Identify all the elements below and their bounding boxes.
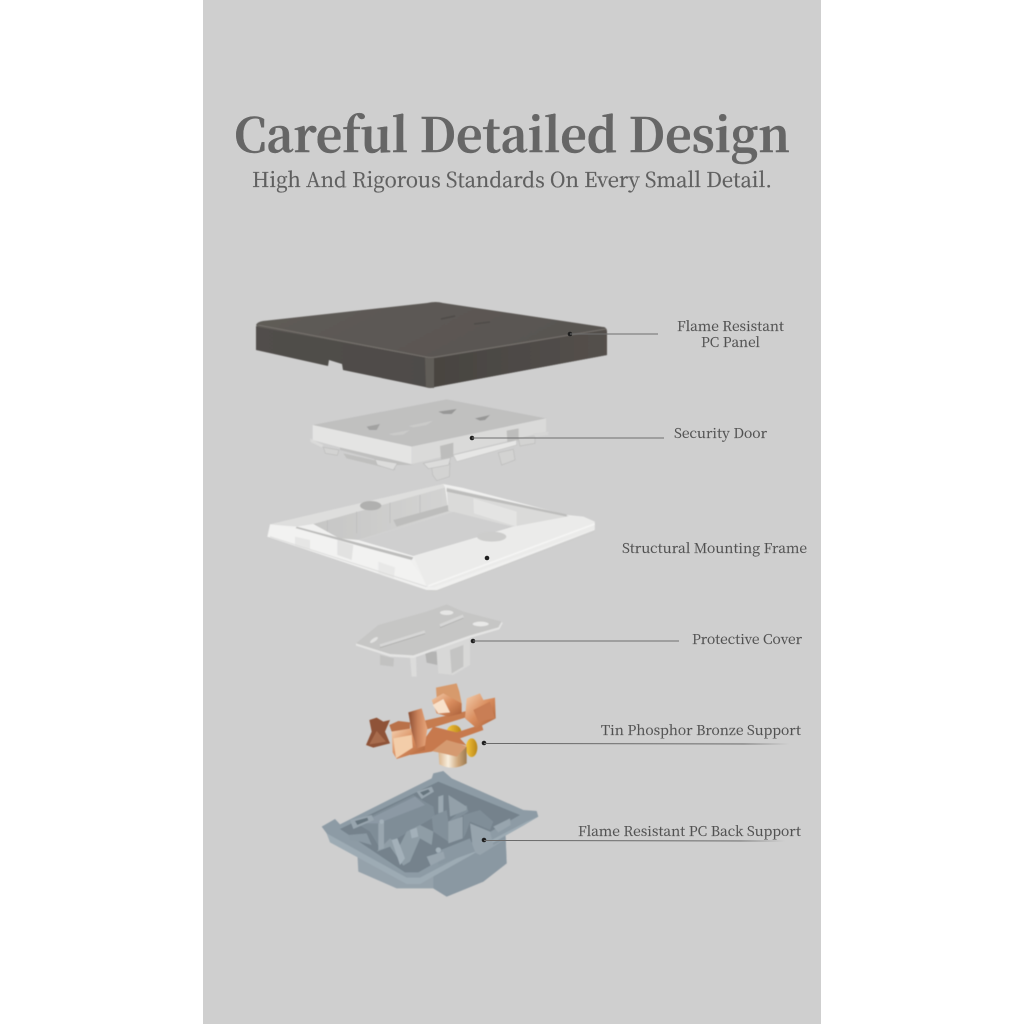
callout: flame resistant PC back support: [482, 820, 801, 842]
structural mounting frame: [267, 484, 595, 591]
callout: protective cover: [471, 628, 803, 648]
callout: tin phosphor bronze support: [482, 719, 801, 745]
security door: [310, 399, 548, 481]
protective cover: [356, 604, 503, 677]
subtitle: High And Rigorous Standards On Every Small Detail.: [252, 163, 772, 193]
callout: structural mounting frame: [485, 537, 807, 560]
flame resistant PC back support: [322, 771, 538, 897]
callout: structural mounting frame: Structural Mounting Frame: [622, 537, 807, 557]
tin phosphor bronze support: [366, 683, 496, 768]
callout: security door: Security Door: [674, 422, 768, 442]
callout: security door: [470, 422, 768, 442]
callout: flame resistant PC panel: Flame Resistant: [677, 315, 784, 335]
callout: flame resistant PC panel: PC Panel: [701, 331, 760, 351]
callout: protective cover: Protective Cover: [692, 628, 803, 648]
title: Careful Detailed Design: [234, 99, 790, 166]
background panel: [203, 0, 821, 1024]
flame resistant PC panel: [256, 302, 607, 388]
exploded product diagram: [256, 302, 607, 897]
callout: flame resistant PC back support: Flame Resistant PC Back Support: [578, 820, 801, 840]
callout: flame resistant PC panel: [568, 315, 784, 351]
callout: tin phosphor bronze support: Tin Phosphor Bronze Support: [601, 719, 801, 739]
